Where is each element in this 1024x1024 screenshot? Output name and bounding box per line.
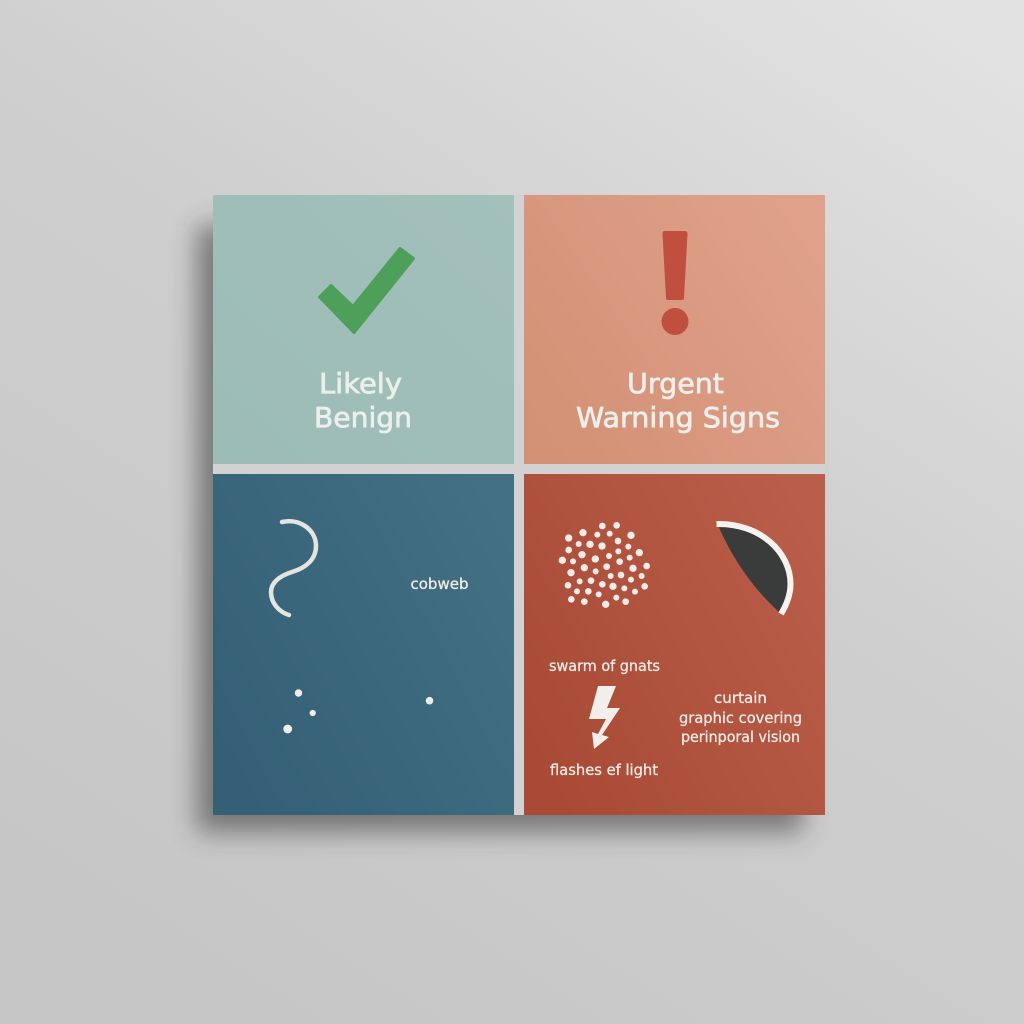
panel: likely benign <box>213 195 514 464</box>
icon: cobweb squiggle <box>271 521 316 615</box>
heading: urgent warning signs <box>576 368 780 434</box>
icon: floater dots <box>283 689 316 733</box>
heading: likely benign <box>314 368 412 434</box>
icon: swarm of gnats dots <box>559 522 650 608</box>
label: swarm of gnats: swarm of gnats <box>549 657 660 675</box>
panel: benign symptoms <box>213 474 514 815</box>
label: flashes of light: flashes ef light <box>550 761 658 779</box>
heading: likely benign: Benign <box>314 402 412 434</box>
label: cobweb: cobweb <box>410 575 468 593</box>
panel: urgent symptoms <box>524 474 825 815</box>
label: curtain description <box>679 689 802 746</box>
icon: green check mark <box>320 248 414 332</box>
icon: single dot <box>426 697 433 704</box>
card shadow <box>197 226 803 832</box>
icon: curtain half circle <box>716 524 790 614</box>
heading: urgent warning signs: Urgent <box>627 368 724 400</box>
card backing <box>213 195 825 815</box>
heading: urgent warning signs: Warning Signs <box>576 402 780 434</box>
label: curtain description: perinporal vision <box>681 728 800 746</box>
panel: urgent warning signs <box>524 195 825 464</box>
label: curtain description: curtain <box>714 689 767 707</box>
label: curtain description: graphic covering <box>679 709 802 727</box>
icon: lightning bolt <box>589 686 620 749</box>
icon: exclamation mark <box>662 231 688 335</box>
heading: likely benign: Likely <box>319 368 402 400</box>
